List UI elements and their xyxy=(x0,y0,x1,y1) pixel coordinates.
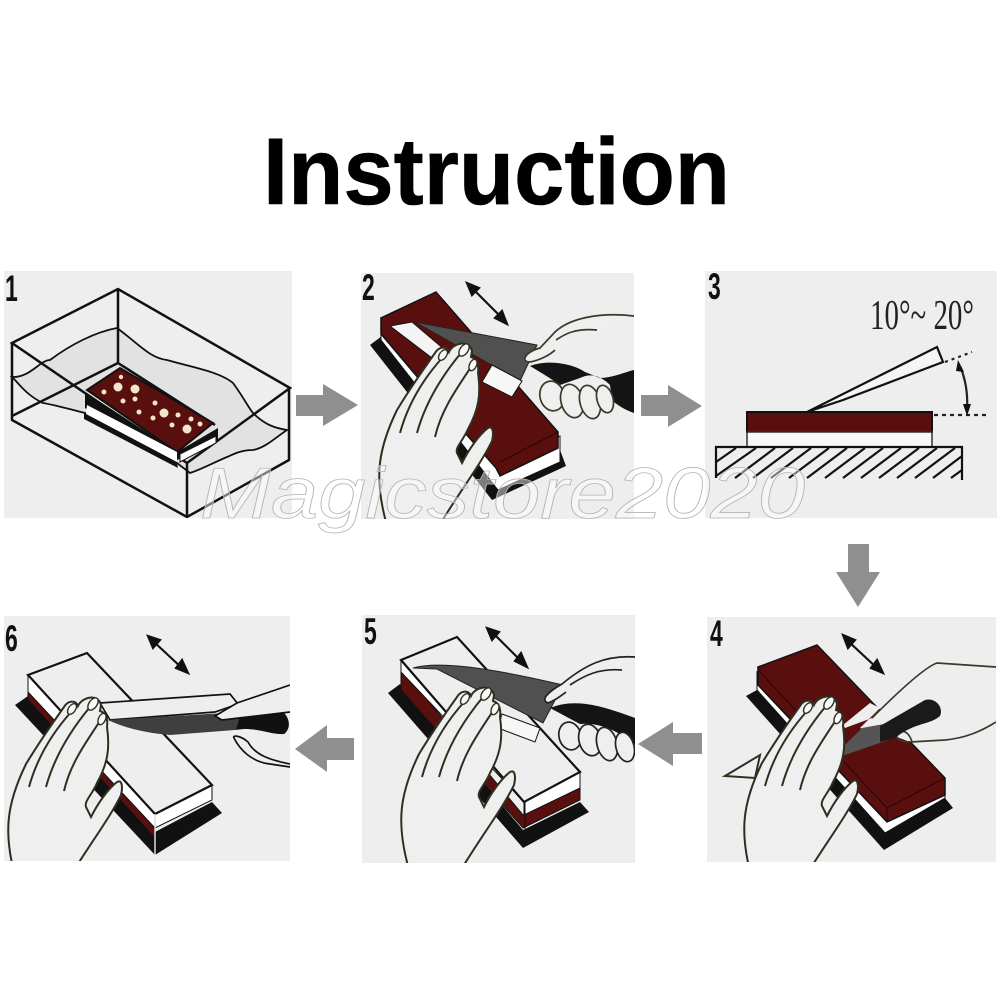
double arrow xyxy=(487,628,527,667)
glass box xyxy=(12,289,290,517)
gripping hand xyxy=(545,657,638,764)
step number 4: 4 xyxy=(710,612,723,654)
panel 3: sharpening angle xyxy=(705,265,997,518)
right hand xyxy=(215,685,290,767)
knife xyxy=(844,724,897,756)
arrow 3 to 4 xyxy=(836,544,880,607)
table hatch xyxy=(716,447,962,480)
double arrow xyxy=(843,635,883,673)
panel 5: fine side sharpening xyxy=(362,610,638,873)
water surface xyxy=(12,328,287,473)
double arrow xyxy=(148,636,188,673)
angle dotted guides and arrow xyxy=(934,352,990,415)
panel 1: soak stone in water xyxy=(4,267,292,518)
arrow 2 to 3 xyxy=(641,385,702,427)
arrow 1 to 2 xyxy=(296,384,358,426)
stone xyxy=(746,645,953,850)
right hand xyxy=(843,663,996,742)
gripping hand xyxy=(525,315,634,421)
knife xyxy=(415,322,537,381)
watermark: Magicstore2020 xyxy=(200,454,805,534)
panel 6: final polish xyxy=(4,616,290,883)
step number 2: 2 xyxy=(362,266,375,308)
knife xyxy=(413,665,563,723)
panel 4: edge draw on flipped stone xyxy=(707,612,996,882)
step number 3: 3 xyxy=(708,265,721,307)
arrow 4 to 5 xyxy=(638,722,702,766)
arrow 5 to 6 xyxy=(295,725,354,772)
left hand xyxy=(401,686,515,873)
panel 2: coarse side sharpening xyxy=(361,266,634,529)
title: Instruction xyxy=(263,119,730,225)
step number 5: 5 xyxy=(364,610,377,652)
knife xyxy=(100,694,238,720)
stone xyxy=(388,637,589,848)
double arrow xyxy=(467,283,507,324)
left hand xyxy=(7,696,123,861)
step number 6: 6 xyxy=(5,617,18,659)
step number 1: 1 xyxy=(5,267,18,309)
left hand xyxy=(744,695,858,882)
blade xyxy=(807,347,943,412)
sharpening stone with bubbles xyxy=(84,368,218,468)
stone xyxy=(15,653,222,855)
left hand xyxy=(379,342,493,529)
stone xyxy=(370,292,566,500)
stone side view xyxy=(747,412,932,432)
blade triangle tip xyxy=(725,755,760,778)
